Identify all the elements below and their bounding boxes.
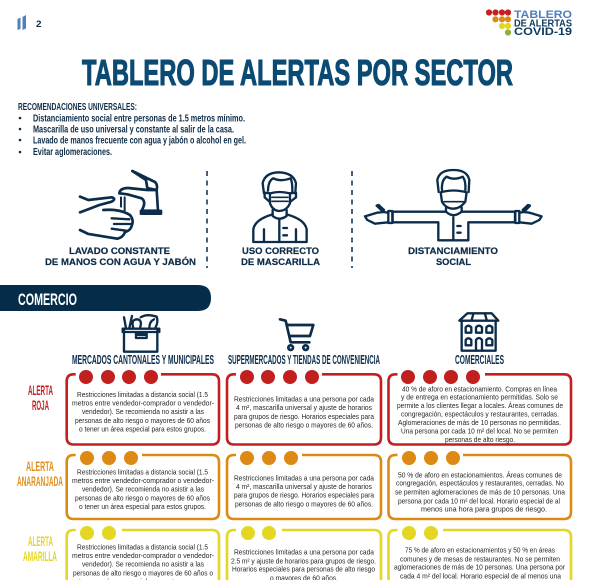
label: distancing bbox=[408, 246, 498, 268]
label: mask use bbox=[241, 246, 320, 268]
page mark bbox=[18, 15, 26, 30]
card: comerciales, anaranjada: 50 % de aforo en estacionamientos. Áreas comunes de bbox=[398, 470, 562, 480]
page number: 2 bbox=[36, 19, 42, 29]
card: supermercados, amarilla: Horarios especiales para personas de alto riesgo bbox=[232, 564, 375, 574]
card: comerciales, amarilla bbox=[388, 526, 571, 580]
card: mercados, roja: metros entre vendedor-comprador o vendedor- bbox=[72, 398, 215, 408]
card: comerciales, roja: y de entrega en estacionamiento permitidas. Solo se bbox=[401, 392, 558, 402]
icon: grocery bag bbox=[123, 315, 159, 352]
card: supermercados, anaranjada: personas de alto riesgo o mayores de 60 años. bbox=[235, 500, 373, 508]
universal recommendations: Mascarilla de uso universal y constante al salir de la casa. bbox=[33, 124, 234, 136]
universal recommendations: Distanciamiento social entre personas de 1.5 metros mínimo. bbox=[33, 112, 245, 124]
card: mercados, amarilla: vendedor). Se recomienda no asistir a las bbox=[82, 560, 204, 568]
card: supermercados, roja: 4 m², mascarilla universal y ajuste de horarios bbox=[236, 403, 372, 412]
label: hand washing bbox=[45, 246, 196, 268]
label: mask use: USO CORRECTO bbox=[242, 246, 319, 257]
card: mercados, anaranjada bbox=[67, 451, 219, 519]
card: mercados, anaranjada: metros entre vendedor-comprador o vendedor- bbox=[72, 476, 215, 485]
card: supermercados, anaranjada bbox=[227, 451, 381, 519]
divider bbox=[206, 171, 208, 268]
card: mercados, anaranjada: personas de alto riesgo o mayores de 60 años bbox=[75, 494, 210, 502]
text: ANARANJADA bbox=[17, 473, 63, 489]
card: comerciales, amarilla: comunes y de mesas de restaurantes. No se permiten bbox=[400, 554, 560, 564]
card: supermercados, roja bbox=[227, 370, 381, 444]
label: hand washing: DE MANOS CON AGUA Y JABÓN bbox=[45, 256, 196, 268]
label: alerta amarilla bbox=[23, 533, 57, 564]
card: comerciales, roja: permite a los clientes llegar a locales. Áreas comunes de bbox=[397, 401, 563, 410]
card: supermercados, anaranjada: para grupos de riesgo. Horarios especiales para bbox=[234, 490, 374, 500]
card: comerciales, roja: congregación, espectáculos y restaurantes, cerradas. bbox=[401, 410, 559, 418]
card: comerciales, anaranjada: persona por cada 10 m² del local. Horario especial de al bbox=[398, 496, 560, 506]
card: comerciales, roja: Aglomeraciones de más de 10 personas no permitidas. bbox=[398, 418, 561, 427]
card: supermercados, roja: para grupos de riesgo. Horarios especiales para bbox=[234, 412, 374, 421]
logo: tablero de alertas covid-19 bbox=[486, 9, 572, 38]
universal recommendations: RECOMENDACIONES UNIVERSALES: bbox=[18, 101, 137, 113]
logo: tablero de alertas covid-19: TABLERO bbox=[514, 9, 572, 21]
card: supermercados, amarilla bbox=[227, 526, 381, 580]
icon: building bbox=[459, 313, 498, 351]
heading: mercados: MERCADOS CANTONALES Y MUNICIPALES bbox=[72, 352, 214, 367]
divider bbox=[351, 171, 353, 268]
card: mercados, anaranjada: Restricciones limitadas a distancia social (1.5 bbox=[77, 468, 208, 476]
card: comerciales, anaranjada: se permiten aglomeraciones de más de 10 personas. Una bbox=[395, 488, 565, 496]
label: mask use: DE MASCARILLA bbox=[241, 257, 320, 268]
icon: person with mask bbox=[253, 172, 307, 242]
card: comerciales, roja bbox=[388, 370, 571, 444]
label: alerta anaranjada bbox=[17, 458, 63, 489]
card: comerciales, roja: personas de alto riesgo. bbox=[445, 435, 515, 444]
card: comerciales, roja: 40 % de aforo en estacionamiento. Compras en línea bbox=[402, 384, 557, 394]
logo: tablero de alertas covid-19: COVID-19 bbox=[514, 26, 572, 38]
label: alerta amarilla: ALERTA bbox=[28, 533, 53, 549]
card: comerciales, amarilla: 75 % de aforo en estacionamientos y 50 % en áreas bbox=[405, 546, 555, 554]
logo: tablero de alertas covid-19: DE ALERTAS bbox=[514, 18, 572, 30]
text: SUPERMERCADOS Y TIENDAS DE CONVENIENCIA bbox=[228, 352, 380, 367]
card: supermercados, anaranjada: 4 m², mascarilla universal y ajuste de horarios bbox=[236, 482, 372, 491]
card: mercados, roja: personas de alto riesgo o mayores de 60 años bbox=[75, 416, 210, 425]
section banner: comercio: COMERCIO bbox=[18, 291, 77, 309]
universal recommendations: Evitar aglomeraciones. bbox=[33, 146, 112, 158]
card: supermercados, roja: Restricciones limitadas a una persona por cada bbox=[234, 394, 374, 404]
card: mercados, amarilla: personas de alto riesgo o mayores de 60 años o bbox=[73, 568, 213, 578]
label: alerta roja: ROJA bbox=[32, 397, 49, 413]
icon: person with arms out bbox=[365, 170, 542, 240]
universal recommendations: Lavado de manos frecuente con agua y jabón o alcohol en gel. bbox=[33, 134, 246, 146]
card: supermercados, amarilla: Restricciones limitadas a una persona por cada bbox=[234, 548, 374, 556]
text: ALERTA bbox=[28, 382, 53, 398]
card: supermercados, roja: personas de alto riesgo o mayores de 60 años. bbox=[235, 420, 373, 430]
card: mercados, roja: o tener un área especial para estos grupos. bbox=[79, 424, 206, 434]
card: comerciales, anaranjada: congregación, espectáculos y restaurantes, cerradas. No bbox=[396, 478, 564, 488]
text: AMARILLA bbox=[23, 548, 57, 564]
card: supermercados, amarilla: 2.5 m² y ajuste de horarios para grupos de riesgo. bbox=[231, 556, 376, 566]
card: mercados, amarilla bbox=[67, 526, 219, 580]
card: mercados, amarilla: Restricciones limitadas a distancia social (1.5 bbox=[77, 542, 208, 552]
card: mercados, roja bbox=[67, 370, 219, 444]
section banner: comercio bbox=[0, 285, 211, 311]
card: comerciales, roja: Una persona por cada 10 m² del local. No se permiten bbox=[401, 426, 558, 436]
card: mercados, amarilla: metros entre vendedor-comprador o vendedor- bbox=[72, 551, 215, 560]
label: distancing: SOCIAL bbox=[436, 257, 471, 268]
card: supermercados, anaranjada: Restricciones limitadas a una persona por cada bbox=[234, 474, 374, 482]
card: comerciales, anaranjada bbox=[388, 451, 571, 519]
heading: comerciales: COMERCIALES bbox=[455, 352, 504, 367]
card: comerciales, anaranjada: menos una hora para grupos de riesgo. bbox=[421, 504, 547, 514]
icon: shopping cart bbox=[280, 319, 313, 350]
universal recommendations bbox=[18, 101, 246, 158]
card: mercados, anaranjada: vendedor). Se recomienda no asistir a las bbox=[82, 484, 204, 494]
card: comerciales, amarilla: aglomeraciones de más de 10 personas. Una persona por bbox=[394, 562, 566, 572]
label: alerta roja bbox=[28, 382, 53, 413]
card: mercados, roja: vendedor). Se recomienda no asistir a las bbox=[82, 407, 204, 416]
icon: hand washing bbox=[80, 171, 161, 239]
card: mercados, anaranjada: o tener un área especial para estos grupos. bbox=[79, 502, 206, 511]
label: alerta anaranjada: ALERTA bbox=[26, 458, 54, 474]
label: hand washing: LAVADO CONSTANTE bbox=[69, 246, 170, 257]
card: mercados, roja: Restricciones limitadas a distancia social (1.5 bbox=[77, 390, 208, 399]
label: distancing: DISTANCIAMIENTO bbox=[408, 246, 498, 257]
